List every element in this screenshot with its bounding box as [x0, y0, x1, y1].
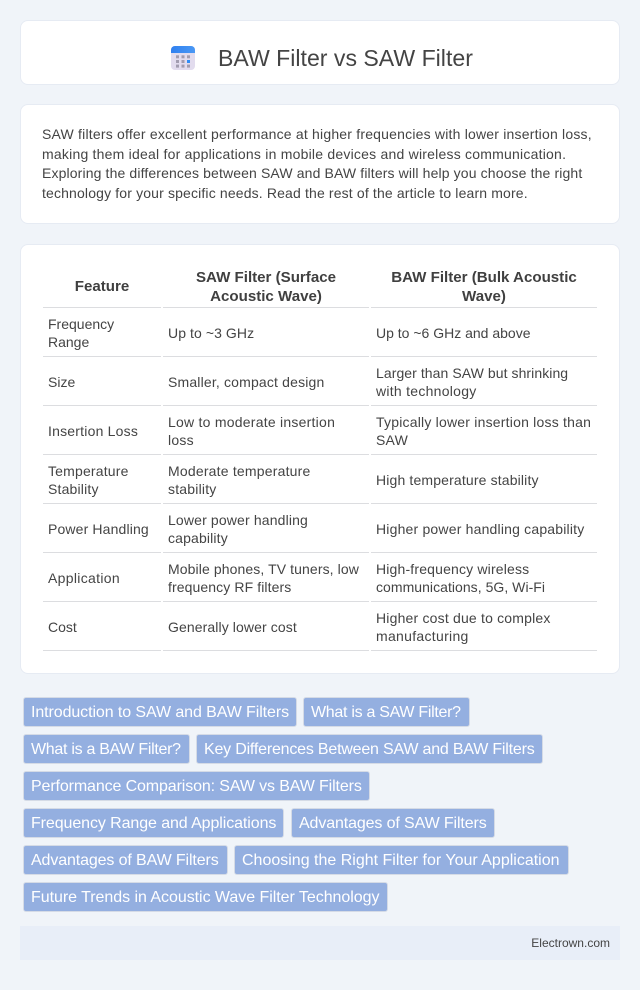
intro paragraph: SAW filters offer excellent performance at higher frequencies with lower insertion loss,: [42, 126, 592, 142]
intro paragraph: [42, 126, 592, 201]
table rows: Moderate temperature: [168, 463, 311, 479]
table rows: manufacturing: [376, 628, 469, 644]
topic link chips: Introduction to SAW and BAW Filters: [31, 704, 289, 721]
table header: Wave): [462, 288, 506, 305]
table rows: frequency RF filters: [168, 579, 291, 595]
topic link chips: Future Trends in Acoustic Wave Filter Technology: [31, 889, 379, 906]
table rows: Temperature: [48, 463, 129, 479]
table rows: Range: [48, 334, 89, 350]
table rows: Higher cost due to complex: [376, 610, 551, 626]
comparison table panel: [20, 244, 620, 674]
table header: Acoustic Wave): [210, 288, 322, 305]
table rows: Typically lower insertion loss than: [376, 414, 591, 430]
table header: [75, 269, 577, 305]
table rows: Stability: [48, 481, 99, 497]
table rows: High-frequency wireless: [376, 561, 529, 577]
icon: calendar: [171, 46, 195, 70]
table header: BAW Filter (Bulk Acoustic: [391, 269, 577, 286]
intro text panel: [20, 104, 620, 224]
table rows: Insertion Loss: [48, 423, 138, 439]
table rows: Generally lower cost: [168, 619, 297, 635]
footer: [20, 926, 620, 960]
table rows: Larger than SAW but shrinking: [376, 365, 568, 381]
intro paragraph: making them ideal for applications in mobile devices and wireless communication.: [42, 146, 566, 162]
intro paragraph: Exploring the differences between SAW and BAW filters will help you choose the right: [42, 165, 582, 181]
topic link chips: Advantages of BAW Filters: [31, 852, 219, 869]
table rows: Application: [48, 570, 120, 586]
topic link chips: Key Differences Between SAW and BAW Filters: [204, 741, 534, 758]
topic link chips: Frequency Range and Applications: [31, 815, 276, 832]
topic link chips: What is a BAW Filter?: [31, 741, 181, 758]
topic link chips: [23, 697, 569, 912]
intro paragraph: technology for your specific needs. Read the rest of the article to learn more.: [42, 184, 528, 200]
table rows: Higher power handling capability: [376, 521, 584, 537]
topic link chips: Choosing the Right Filter for Your Application: [242, 852, 560, 869]
table rows: Mobile phones, TV tuners, low: [168, 561, 359, 577]
topic link chips: Performance Comparison: SAW vs BAW Filters: [31, 778, 362, 795]
table rows: Cost: [48, 619, 77, 635]
table rows: capability: [168, 530, 228, 546]
table rows: Up to ~3 GHz: [168, 325, 254, 341]
table header: SAW Filter (Surface: [196, 269, 336, 286]
title card: [20, 20, 620, 85]
table header: Feature: [75, 278, 129, 295]
table rows: Frequency: [48, 316, 114, 332]
table rows: Size: [48, 374, 75, 390]
topic link chips: Advantages of SAW Filters: [299, 815, 487, 832]
table rows: High temperature stability: [376, 472, 539, 488]
table rows: stability: [168, 481, 216, 497]
table rows: loss: [168, 432, 194, 448]
topic link chips: What is a SAW Filter?: [311, 704, 461, 721]
table rows: SAW: [376, 432, 408, 448]
table rows: communications, 5G, Wi-Fi: [376, 579, 545, 595]
table rows: [43, 307, 597, 651]
table rows: Smaller, compact design: [168, 374, 324, 390]
table rows: Up to ~6 GHz and above: [376, 325, 530, 341]
table rows: Power Handling: [48, 521, 149, 537]
table rows: with technology: [376, 383, 477, 399]
footer credit: Electrown.com: [531, 936, 610, 950]
table rows: Lower power handling: [168, 512, 308, 528]
heading: BAW Filter vs SAW Filter: [218, 45, 473, 71]
table rows: Low to moderate insertion: [168, 414, 335, 430]
